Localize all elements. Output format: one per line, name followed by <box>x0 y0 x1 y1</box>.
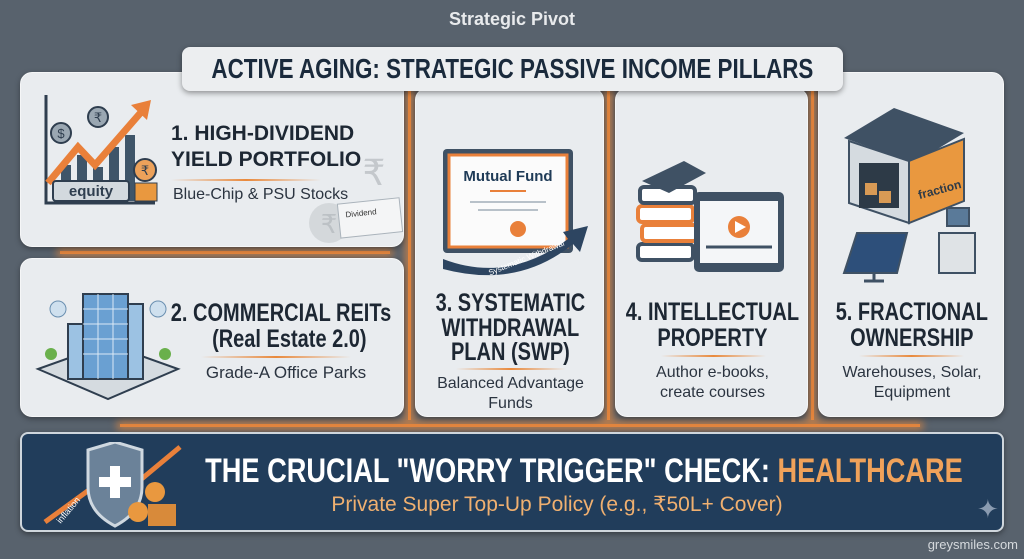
text: balanced advantage <box>437 375 584 412</box>
panel: 5 fractional ownership <box>818 72 1004 417</box>
heading: 4. Intellectual property <box>626 298 799 352</box>
heading: 3. SWP: WITHDRAWAL <box>442 314 579 342</box>
icon: equity chart: equity <box>69 183 114 200</box>
glow dividers <box>408 90 411 420</box>
text: author e-books <box>656 364 769 401</box>
footer: greysmiles.com: greysmiles.com <box>928 537 1018 552</box>
text: blue-chip: Blue-Chip & PSU Stocks <box>173 186 348 203</box>
icon: equity chart <box>44 95 158 204</box>
heading: 1. High-Dividend <box>171 122 361 171</box>
text: grade-A: Grade-A Office Parks <box>206 363 366 382</box>
icon: equity chart: $ <box>57 126 65 141</box>
heading: 2. Commercial REITs: 2. COMMERCIAL REITs <box>171 299 391 327</box>
icon: dividend cheque: Dividend <box>345 207 377 219</box>
icon: dividend cheque <box>309 153 404 243</box>
text: author e-books: Author e-books, <box>656 364 769 381</box>
heading: 3. SWP: 3. SYSTEMATIC <box>436 289 585 317</box>
title box <box>182 47 843 91</box>
icon: warehouse, solar, equipment: fraction <box>917 177 963 202</box>
icon: dividend cheque: ₹ <box>321 209 337 239</box>
panel: 3 SWP <box>415 88 604 417</box>
text: balanced advantage: Funds <box>488 395 533 412</box>
heading: worry trigger: THE CRUCIAL "WORRY TRIGGER" CHECK: HEALTHCARE <box>205 452 963 490</box>
heading: 1. High-Dividend: 1. HIGH-DIVIDEND <box>171 122 354 145</box>
panel: 2 commercial REITs <box>20 258 404 417</box>
heading: 5. Fractional ownership <box>836 298 988 352</box>
heading: 5. Fractional ownership: 5. FRACTIONAL <box>836 298 988 326</box>
icon: mutual fund certificate: Systematic Withdrawal <box>487 239 566 277</box>
text: warehouses: Warehouses, Solar, <box>842 364 982 381</box>
icon: sparkle: ✦ <box>977 494 999 524</box>
heading: 4. Intellectual property: PROPERTY <box>657 324 767 352</box>
heading: 4. Intellectual property: 4. INTELLECTUAL <box>626 298 799 326</box>
text: warehouses: Equipment <box>874 384 950 401</box>
banner: healthcare <box>20 432 1004 532</box>
text: warehouses <box>842 364 982 401</box>
panel: 4 intellectual property <box>615 88 808 417</box>
icon: equity chart: ₹ <box>141 163 149 178</box>
heading: 5. Fractional ownership: OWNERSHIP <box>850 324 973 352</box>
icon: books and tablet <box>636 161 784 272</box>
icon: office building <box>35 293 181 400</box>
icon: warehouse, solar, equipment <box>842 108 976 282</box>
heading: 1. High-Dividend: YIELD PORTFOLIO <box>171 148 361 171</box>
heading: 3. SWP <box>436 289 585 366</box>
text: super top-up: Private Super Top-Up Policy (e.g., ₹50L+ Cover) <box>331 493 783 516</box>
heading: 3. SWP: PLAN (SWP) <box>451 338 570 366</box>
title box: ACTIVE AGING: STRATEGIC PASSIVE INCOME PILLARS <box>211 53 813 84</box>
icon: mutual fund certificate <box>443 149 588 277</box>
heading: 2. Commercial REITs <box>171 299 391 353</box>
icon: shield with inflation arrow <box>44 442 182 528</box>
text: balanced advantage: Balanced Advantage <box>437 375 584 392</box>
icon: shield with inflation arrow: inflation <box>54 495 82 525</box>
icon: mutual fund certificate: Mutual Fund <box>463 168 553 185</box>
heading: Strategic Pivot: Strategic Pivot <box>449 9 575 29</box>
heading: 2. Commercial REITs: (Real Estate 2.0) <box>212 325 367 353</box>
panel: 1 high dividend <box>20 72 404 247</box>
icon: dividend cheque: ₹ <box>363 153 385 193</box>
text: author e-books: create courses <box>660 384 765 401</box>
icon: equity chart: ₹ <box>94 110 102 125</box>
